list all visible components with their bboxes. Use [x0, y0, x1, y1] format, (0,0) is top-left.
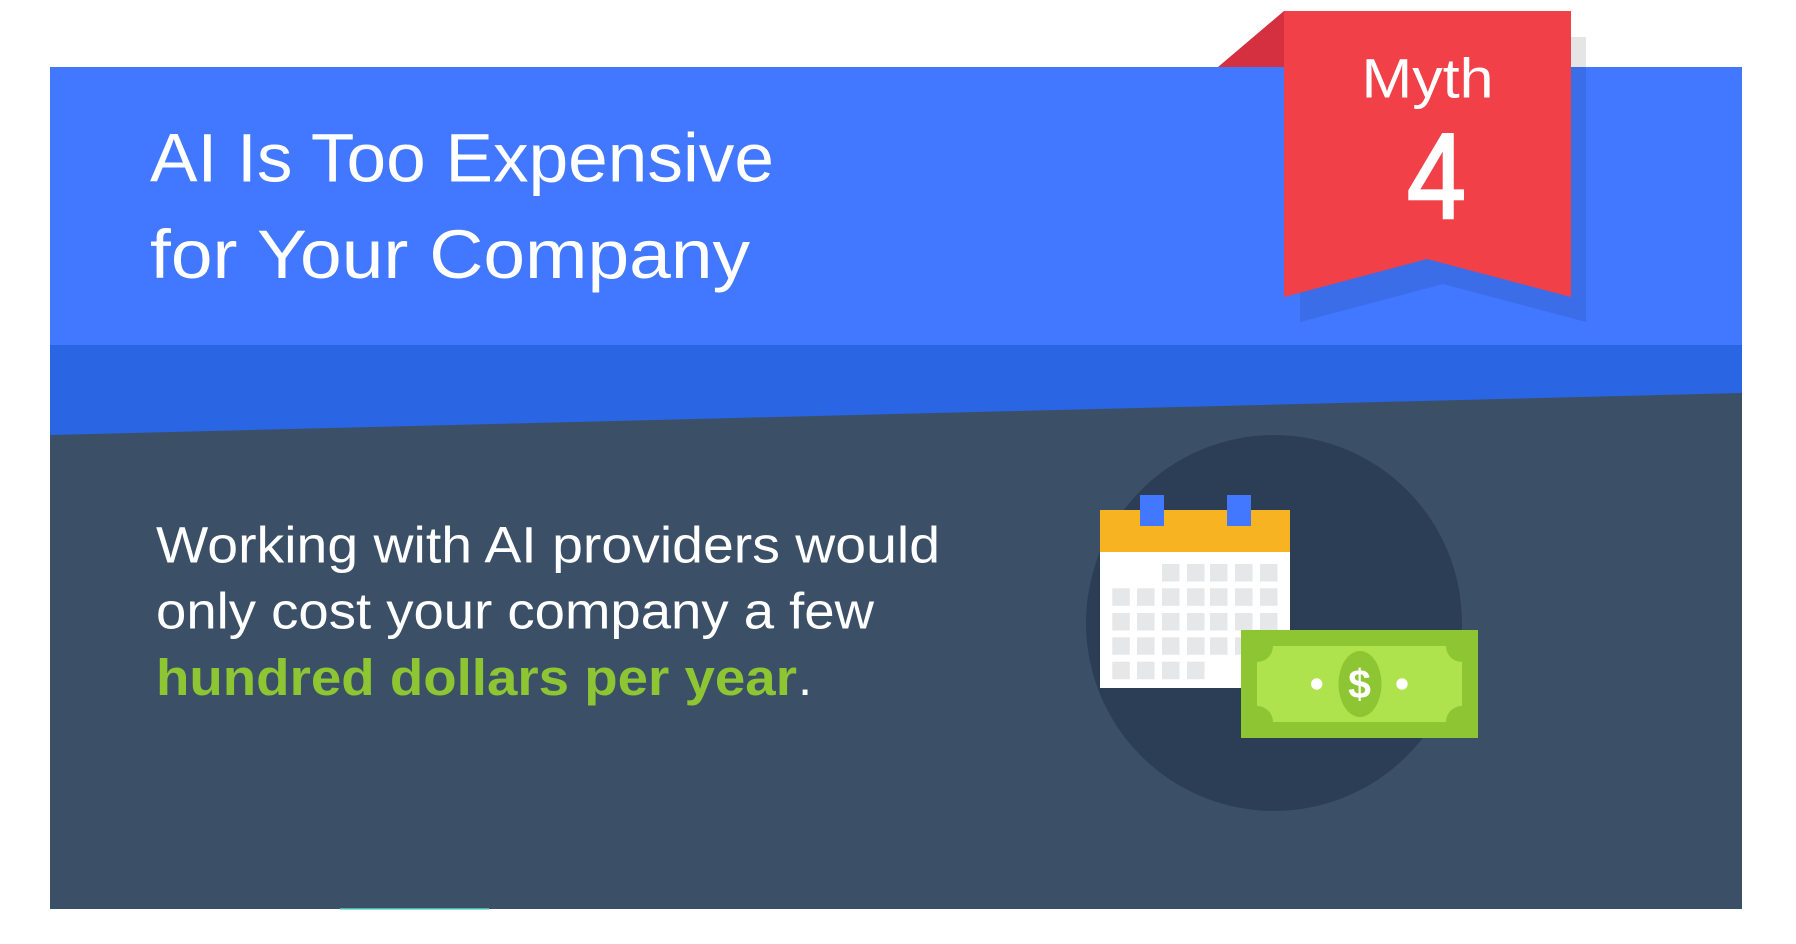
- body text: hundred dollars per year: [156, 649, 797, 706]
- panel: slate body: [50, 393, 1742, 910]
- title: for Your Company: [150, 216, 751, 293]
- body text: Working with AI providers would: [156, 517, 940, 574]
- panel: ribbon badge: [1218, 11, 1586, 322]
- badge number: 4: [1407, 108, 1466, 244]
- badge label: Myth: [1362, 47, 1494, 110]
- icon: dollar bill: $: [1348, 661, 1371, 707]
- panel: blue header: [50, 67, 1742, 437]
- body text: only cost your company a few: [156, 582, 874, 640]
- title: [150, 120, 774, 293]
- icon: circle backdrop: [1086, 435, 1462, 811]
- title: AI Is Too Expensive: [150, 120, 774, 197]
- icon: calendar: [1100, 495, 1290, 688]
- icon: dollar bill: [1241, 630, 1478, 738]
- body text: .: [798, 649, 812, 706]
- body text: [156, 517, 940, 706]
